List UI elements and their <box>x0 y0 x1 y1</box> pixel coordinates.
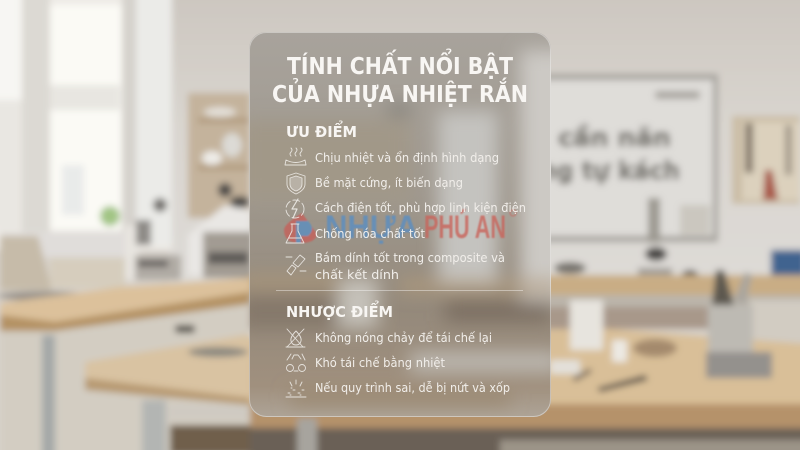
icon: electric bolt <box>286 199 304 218</box>
watermark: Nhựa Phú An: NHỰA <box>325 209 418 245</box>
icon: no melting <box>286 329 305 347</box>
text: hard to recycle: Khó tái chế bằng nhiệt <box>315 355 445 370</box>
text: adhesion: Bám dính tốt trong composite và <box>315 250 505 265</box>
icon: bonded links <box>286 255 306 275</box>
text: chemical resistance: Chống hóa chất tốt <box>315 226 425 241</box>
title: CỦA NHỰA NHIỆT RẮN <box>272 77 528 108</box>
title <box>272 48 528 108</box>
background: blurred laboratory scene: ng tự kách <box>540 156 680 185</box>
text: heat resistance: Chịu nhiệt và ổn định hình dạng <box>315 150 499 165</box>
text and icons layer <box>272 48 528 397</box>
watermark: Nhựa Phú An <box>284 209 516 245</box>
heading: nhược điểm: NHƯỢC ĐIỂM <box>286 299 393 321</box>
icon: heat on surface <box>285 148 306 165</box>
icon: flask <box>286 224 304 243</box>
title: TÍNH CHẤT NỔI BẬT <box>287 48 513 80</box>
icon: shield <box>287 173 305 194</box>
section: ưu điểm <box>285 119 526 282</box>
section: nhược điểm <box>286 299 510 397</box>
icon: recycle <box>286 354 306 372</box>
panel: frosted glass card <box>240 32 570 417</box>
heading: ưu điểm: ƯU ĐIỂM <box>286 119 357 141</box>
text: cracks and porosity: Nếu quy trình sai, dễ bị nứt và xốp <box>315 380 510 395</box>
watermark: Nhựa Phú An: PHÚ AN <box>424 209 506 245</box>
text: hard surface: Bề mặt cứng, ít biến dạng <box>315 175 463 190</box>
text: electrical insulation: Cách điện tốt, phù hợp linh kiện điện <box>315 200 526 215</box>
background: blurred laboratory scene: cần năn <box>558 123 671 152</box>
text: adhesion second line: chất kết dính <box>315 267 399 282</box>
icon: cracks and pores <box>286 380 306 397</box>
text: cannot re-melt: Không nóng chảy để tái chế lại <box>315 330 492 345</box>
